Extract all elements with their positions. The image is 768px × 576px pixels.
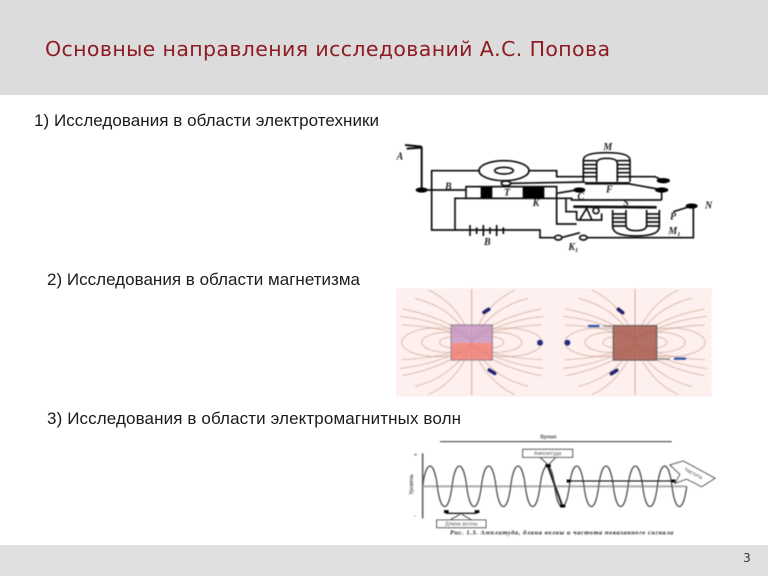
chart: sine wave with amplitude, wavelength and frequency: Уровень	[409, 474, 415, 495]
diagram: coherer receiver circuit: N	[704, 200, 713, 211]
diagram: coherer receiver circuit: S	[623, 198, 629, 209]
diagram: coherer receiver circuit: C	[577, 191, 584, 202]
footer band	[0, 545, 768, 576]
title: Основные направления исследований А.С. Попова	[45, 37, 610, 61]
diagram: coherer receiver circuit: A	[396, 151, 404, 162]
diagram: magnetic field of coils	[396, 288, 712, 397]
diagram: coherer receiver circuit: K₁	[567, 242, 578, 253]
header band	[0, 0, 768, 95]
chart: sine wave with amplitude, wavelength and frequency: Частота	[683, 467, 703, 481]
chart: sine wave with amplitude, wavelength and frequency: Рис. 1.3. Амплитуда, длина волны и частота показанного сигнала	[450, 530, 674, 537]
diagram: coherer receiver circuit: K	[532, 198, 541, 209]
diagram: coherer receiver circuit: P	[670, 211, 677, 222]
chart: sine wave with amplitude, wavelength and frequency: Амплитуда	[534, 451, 561, 457]
page number: 3	[743, 551, 751, 565]
diagram: coherer receiver circuit: M₁	[667, 226, 681, 237]
heading: electromagnetic waves: 3) Исследования в области электромагнитных волн	[47, 409, 461, 428]
diagram: coherer receiver circuit: B	[483, 237, 491, 248]
diagram: coherer receiver circuit: M	[602, 142, 613, 153]
heading: magnetism: 2) Исследования в области магнетизма	[47, 270, 361, 289]
diagram: coherer receiver circuit: F	[605, 185, 613, 196]
diagram: coherer receiver circuit: T	[504, 188, 511, 199]
diagram: coherer receiver circuit	[396, 142, 713, 253]
chart: sine wave with amplitude, wavelength and frequency: +	[414, 453, 417, 459]
chart: sine wave with amplitude, wavelength and frequency: Время	[540, 434, 556, 440]
chart: sine wave with amplitude, wavelength and frequency	[409, 434, 715, 537]
chart: sine wave with amplitude, wavelength and frequency: Длина волны	[445, 522, 478, 528]
heading: electrical engineering: 1) Исследования в области электротехники	[34, 111, 379, 130]
diagram: coherer receiver circuit: B	[444, 181, 452, 192]
chart: sine wave with amplitude, wavelength and frequency: -	[414, 513, 416, 519]
